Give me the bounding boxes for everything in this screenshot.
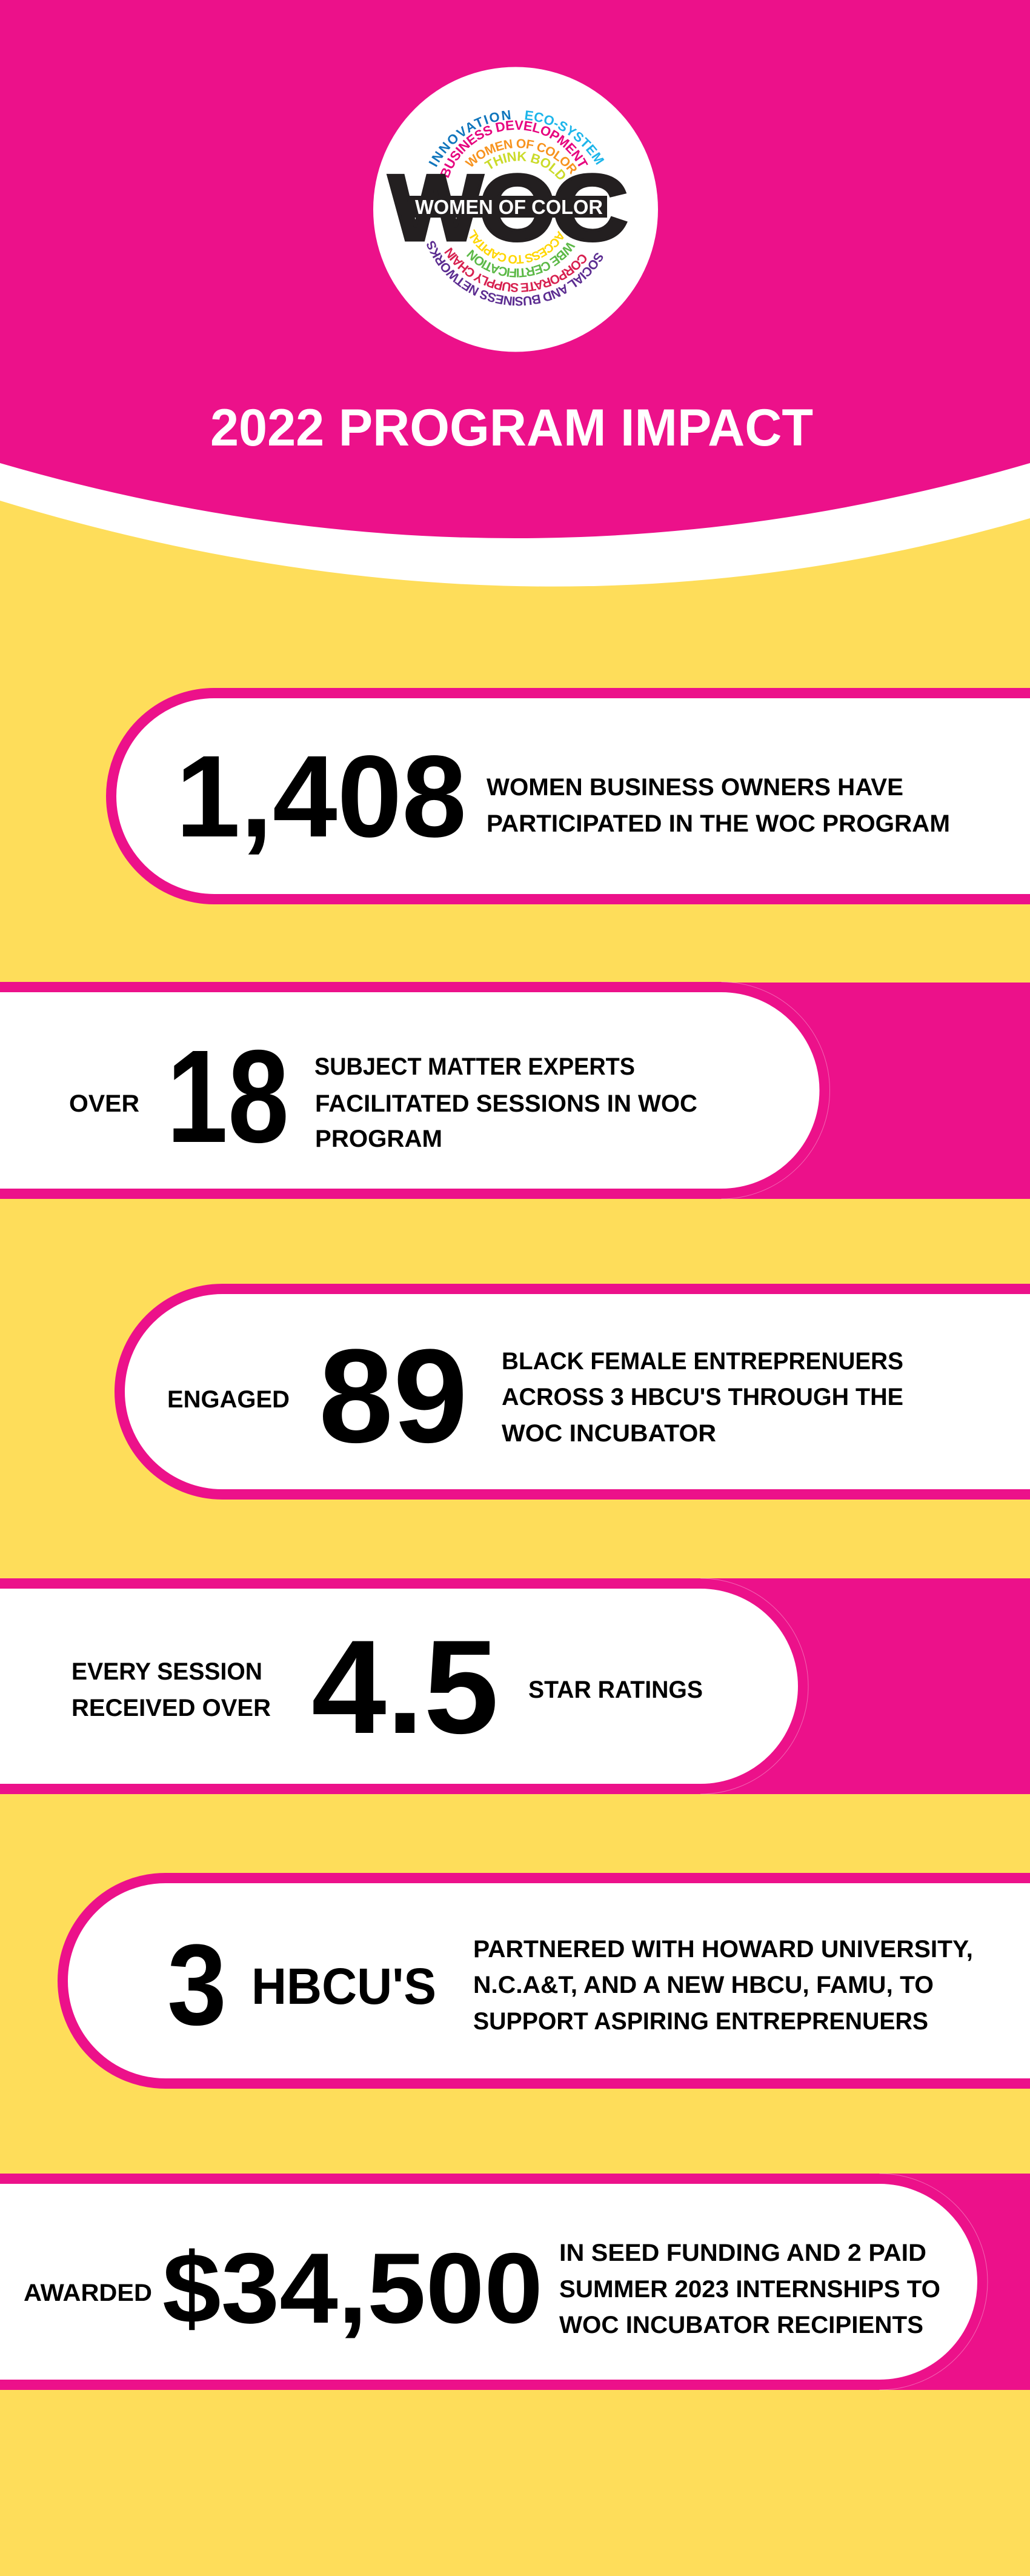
description: WOC INCUBATOR RECIPIENTS bbox=[559, 2312, 923, 2338]
panel: engaged 89 black female entrepreneurs bbox=[119, 1289, 1030, 1495]
big number: 3 bbox=[167, 1921, 227, 2049]
description: PARTICIPATED IN THE WOC PROGRAM bbox=[487, 810, 950, 837]
logo wordmark WOC: O bbox=[479, 155, 556, 260]
prefix: OVER bbox=[69, 1090, 139, 1117]
pill bbox=[0, 2178, 983, 2384]
pill bbox=[0, 987, 825, 1194]
HBCU label: HBCU'S bbox=[251, 1958, 436, 2015]
prefix: AWARDED bbox=[24, 2280, 152, 2306]
title: 2022 PROGRAM IMPACT bbox=[210, 399, 813, 457]
logo arc text: think bold: THINK BOLD bbox=[483, 152, 565, 179]
description: PROGRAM bbox=[315, 1126, 442, 1152]
logo arc text: eco-system: ECO-SYSTEM bbox=[525, 110, 605, 165]
prefix: ENGAGED bbox=[167, 1386, 290, 1413]
pill bbox=[0, 1583, 803, 1789]
panel: 3 HBCU's bbox=[62, 1878, 1030, 2084]
description: SUBJECT MATTER EXPERTS bbox=[314, 1053, 635, 1080]
prefix bbox=[71, 1658, 271, 1721]
pink band bbox=[0, 983, 1030, 1199]
logo wordmark WOC bbox=[388, 155, 628, 260]
description: BLACK FEMALE ENTREPRENUERS bbox=[502, 1348, 903, 1375]
logo arc text: social and business networks: SOCIAL AND BUSINESS NETWORKS bbox=[427, 241, 603, 305]
prefix: EVERY SESSION bbox=[71, 1658, 262, 1685]
description: IN SEED FUNDING AND 2 PAID bbox=[559, 2240, 926, 2266]
suffix: STAR RATINGS bbox=[528, 1677, 703, 1703]
pink band bbox=[0, 2174, 1030, 2390]
big number: $34,500 bbox=[162, 2232, 543, 2344]
pill outer highlight line bbox=[880, 2174, 988, 2390]
description: PARTNERED WITH HOWARD UNIVERSITY, bbox=[473, 1936, 973, 1963]
logo wordmark WOC: W bbox=[388, 155, 483, 260]
description: WOC INCUBATOR bbox=[502, 1420, 716, 1447]
pill outer highlight line bbox=[721, 982, 830, 1199]
logo arc text: business development: BUSINESS DEVELOPMENT bbox=[440, 120, 588, 178]
logo bar text: WOMEN OF COLOR bbox=[415, 196, 603, 218]
description bbox=[314, 1053, 697, 1152]
logo wordmark WOC: C bbox=[551, 155, 628, 260]
logo arc text: wbe certification: WBE CERTIFICATION bbox=[467, 242, 576, 278]
description bbox=[487, 774, 950, 837]
description: FACILITATED SESSIONS IN WOC bbox=[315, 1090, 697, 1117]
panel: 1,408 women business owners bbox=[111, 693, 1030, 899]
pill outer highlight line bbox=[700, 1578, 808, 1794]
description: ACROSS 3 HBCU'S THROUGH THE bbox=[502, 1384, 903, 1410]
logo white circle bbox=[373, 67, 658, 352]
logo arc text: corporate supply chain: CORPORATE SUPPLY CHAIN bbox=[444, 247, 586, 292]
panel: 4.5 star ratings bbox=[0, 1578, 1030, 1794]
description: WOMEN BUSINESS OWNERS HAVE bbox=[487, 774, 903, 801]
header white swoosh bbox=[0, 424, 1030, 587]
logo bbox=[373, 67, 658, 352]
pink band bbox=[0, 1578, 1030, 1794]
logo arc text: access to capital: ACCESS TO CAPITAL bbox=[469, 229, 563, 264]
logo arc text: innovation: INNOVATION bbox=[428, 110, 511, 167]
header pink panel bbox=[0, 0, 1030, 538]
description: N.C.A&T, AND A NEW HBCU, FAMU, TO bbox=[473, 1972, 934, 1998]
big number: 4.5 bbox=[311, 1612, 499, 1761]
big number: 18 bbox=[167, 1023, 289, 1170]
pill bbox=[111, 693, 1030, 899]
prefix: RECEIVED OVER bbox=[71, 1695, 271, 1721]
logo black bar bbox=[408, 196, 607, 218]
description bbox=[559, 2240, 940, 2338]
description: SUPPORT ASPIRING ENTREPRENUERS bbox=[473, 2008, 928, 2035]
big number: 89 bbox=[319, 1321, 468, 1470]
description bbox=[473, 1936, 973, 2035]
big number: 1,408 bbox=[176, 731, 467, 861]
panel: over 18 subject matter experts bbox=[0, 982, 1030, 1199]
panel: awarded $34,500 bbox=[0, 2174, 1030, 2390]
logo arc text: women of color: WOMEN OF COLOR bbox=[464, 139, 577, 175]
pill bbox=[119, 1289, 1030, 1495]
description bbox=[502, 1348, 903, 1447]
pill bbox=[62, 1878, 1030, 2084]
description: SUMMER 2023 INTERNSHIPS TO bbox=[559, 2276, 940, 2303]
